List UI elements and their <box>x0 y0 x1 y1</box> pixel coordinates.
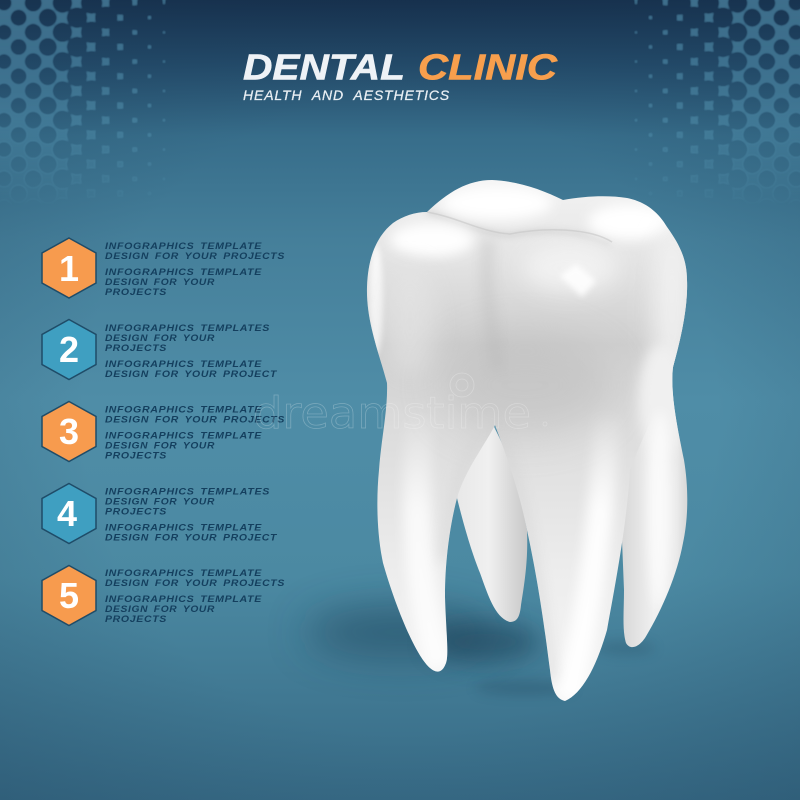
icon: orange hexagon 1: 1 <box>59 248 79 289</box>
text block 5: INFOGRAPHICS TEMPLATE <box>105 593 262 604</box>
list item 4 <box>42 484 278 544</box>
title: CLINIC <box>418 46 558 88</box>
text block 3 <box>105 404 285 460</box>
text block 5: DESIGN FOR YOUR <box>105 603 215 614</box>
right root soft highlight <box>638 345 686 610</box>
root highlights <box>417 410 440 668</box>
middle root <box>457 420 527 622</box>
text block 2: DESIGN FOR YOUR <box>105 332 215 343</box>
text block 1 <box>105 240 285 297</box>
text block 5: DESIGN FOR YOUR PROJECTS <box>105 577 285 588</box>
text block 3: DESIGN FOR YOUR PROJECTS <box>105 414 285 424</box>
list item 1 <box>42 238 285 298</box>
right root <box>620 280 687 647</box>
text block 1: DESIGN FOR YOUR PROJECTS <box>105 250 285 261</box>
text block 5: PROJECTS <box>105 613 167 624</box>
text block 4: DESIGN FOR YOUR PROJECT <box>105 532 278 542</box>
ridge line <box>427 212 612 242</box>
text block 4: INFOGRAPHICS TEMPLATES <box>105 486 270 496</box>
icon: orange hexagon 1 <box>42 238 96 298</box>
list item 2 <box>42 320 278 380</box>
text block 3: PROJECTS <box>105 450 167 460</box>
subtitle: HEALTH AND AESTHETICS <box>243 88 450 103</box>
halftone pattern: top left <box>0 0 166 186</box>
title <box>243 46 558 88</box>
icon: orange hexagon 5 <box>42 566 96 626</box>
text block 4: PROJECTS <box>105 506 167 516</box>
text block 4 <box>105 486 278 542</box>
text block 2: INFOGRAPHICS TEMPLATE <box>105 358 262 369</box>
icon: orange hexagon 3 <box>42 402 96 462</box>
text block 1: PROJECTS <box>105 286 167 297</box>
text block 2 <box>105 322 278 379</box>
text block 1: INFOGRAPHICS TEMPLATE <box>105 240 262 251</box>
icon: blue hexagon 2: 2 <box>59 329 79 370</box>
text block 3: INFOGRAPHICS TEMPLATE <box>105 404 262 414</box>
watermark <box>253 373 547 439</box>
crown lobes highlight <box>390 223 474 257</box>
main crown and front roots <box>360 175 695 705</box>
tooth illustration <box>360 175 695 705</box>
text block 5 <box>105 567 285 624</box>
watermark: dreamstime <box>253 388 531 439</box>
icon: blue hexagon 4 <box>42 484 96 544</box>
text block 2: INFOGRAPHICS TEMPLATES <box>105 322 270 333</box>
list item 3 <box>42 402 285 462</box>
text block 4: INFOGRAPHICS TEMPLATE <box>105 522 262 532</box>
tooth shadow on floor <box>305 606 655 695</box>
text block 5: INFOGRAPHICS TEMPLATE <box>105 567 262 578</box>
title: DENTAL <box>243 46 405 88</box>
text block 2: PROJECTS <box>105 342 167 353</box>
icon: blue hexagon 4: 4 <box>57 493 77 534</box>
crown shading <box>447 349 603 436</box>
text block 1: INFOGRAPHICS TEMPLATE <box>105 266 262 277</box>
text block 3: DESIGN FOR YOUR <box>105 440 215 450</box>
icon: blue hexagon 2 <box>42 320 96 380</box>
icon: orange hexagon 5: 5 <box>59 575 79 616</box>
halftone pattern: top right <box>634 0 800 186</box>
text block 2: DESIGN FOR YOUR PROJECT <box>105 368 278 379</box>
text block 3: INFOGRAPHICS TEMPLATE <box>105 430 262 440</box>
list item 5 <box>42 566 285 626</box>
icon: orange hexagon 3: 3 <box>59 411 79 452</box>
text block 4: DESIGN FOR YOUR <box>105 496 215 506</box>
text block 1: DESIGN FOR YOUR <box>105 276 215 287</box>
